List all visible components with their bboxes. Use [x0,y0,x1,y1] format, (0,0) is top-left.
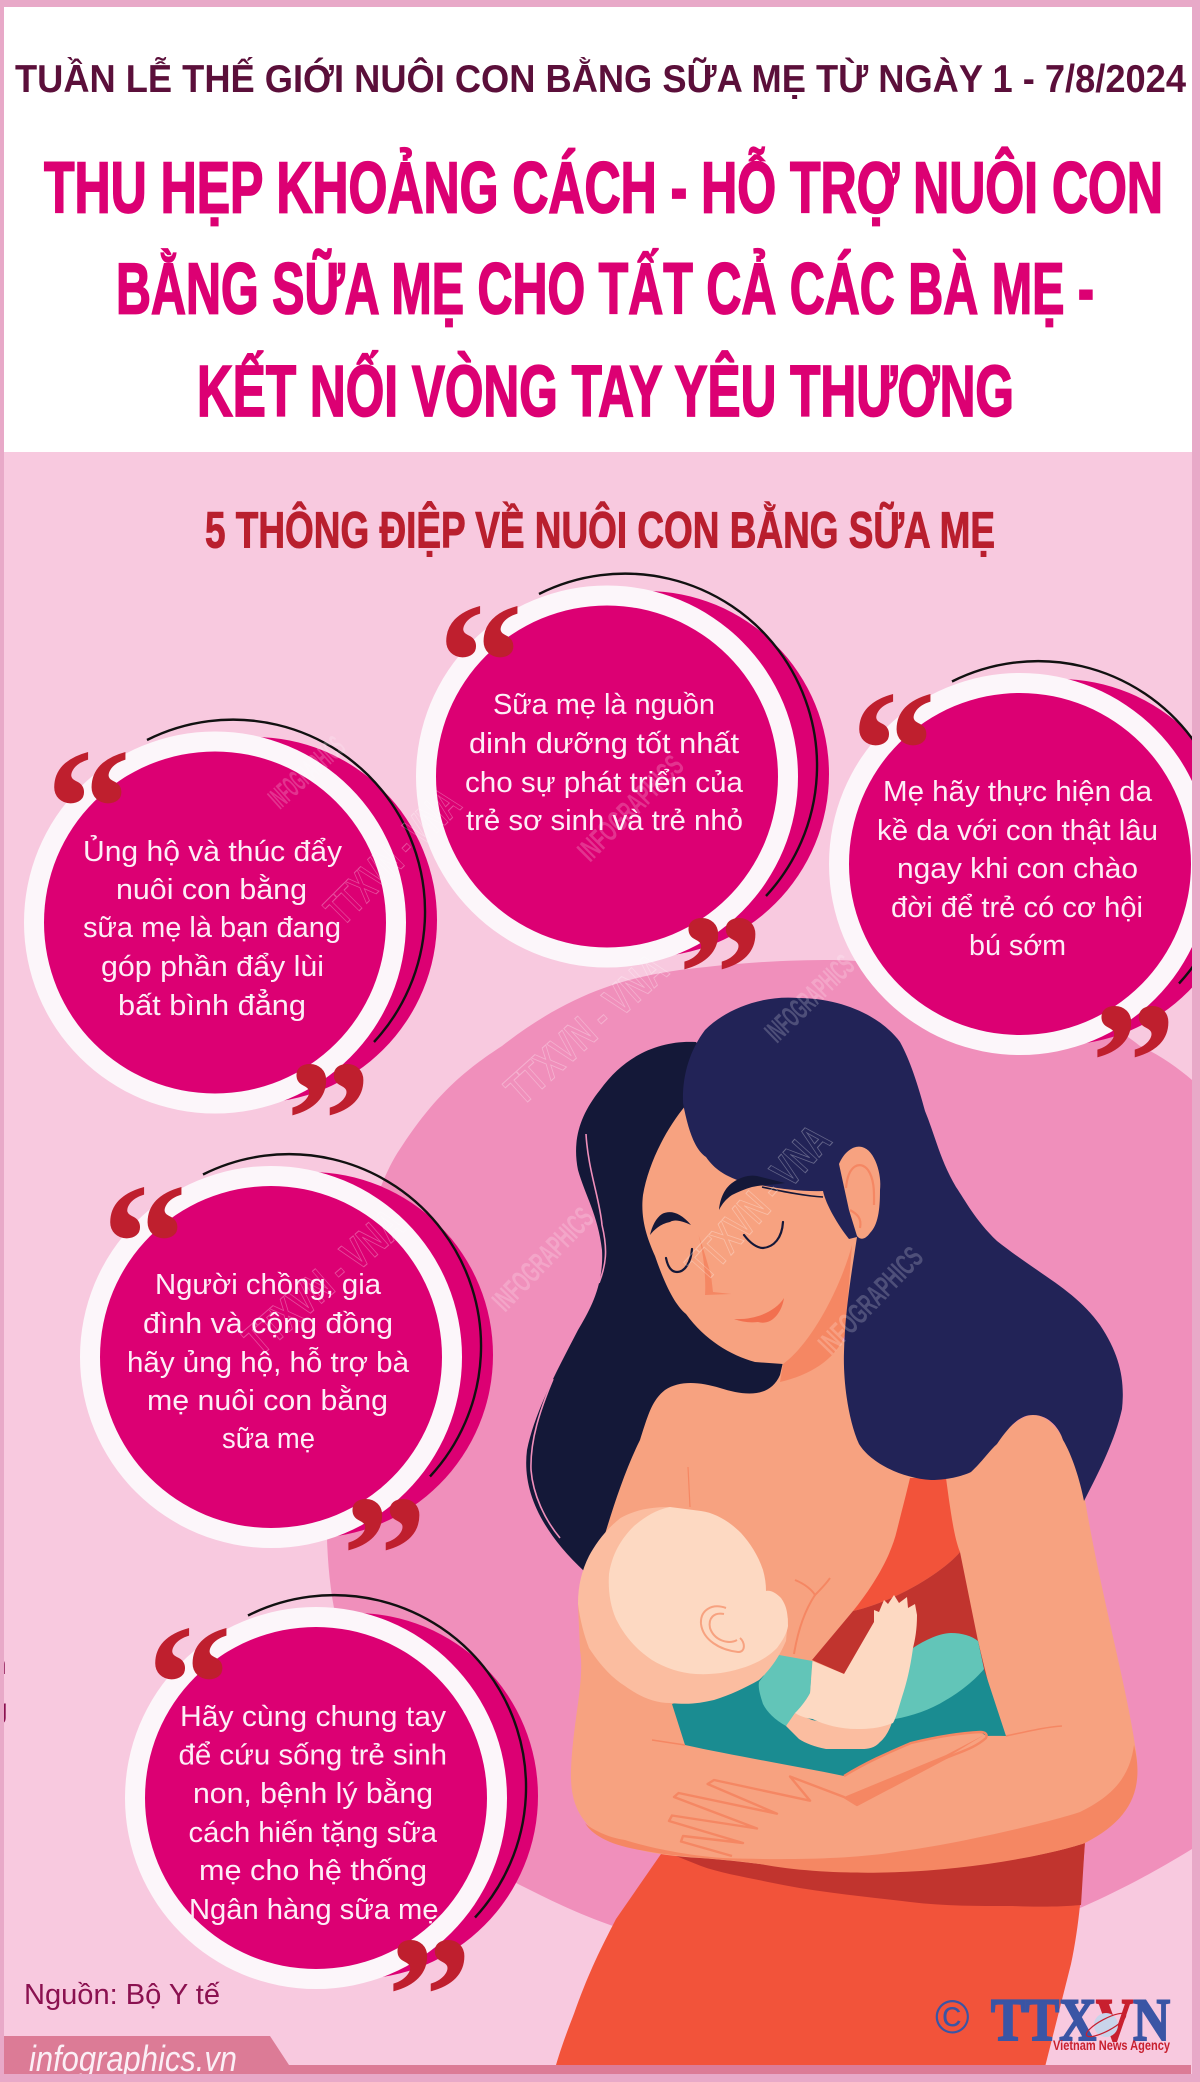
message text: đời để trẻ có cơ hội [891,892,1143,924]
dress waist shadow [661,1840,1085,1907]
message text [178,1701,447,1926]
message text: nuôi con bằng [116,874,307,906]
eyebrows [650,1176,785,1235]
front hair [683,998,1123,1501]
watermarks: TTXVN - VNA [496,944,677,1114]
message text: Sữa mẹ là nguồn [493,689,715,721]
agency wordmark: TTXVN [991,1987,1170,2053]
logo: TTXVN [935,1987,1170,2053]
mouth [734,1298,784,1323]
message text [83,835,343,1022]
quote marks: “ [147,1590,232,1778]
mother body and arms [571,1340,1137,1872]
baby arm and hand [795,1595,917,1729]
watermarks [234,730,930,1365]
lower dress [556,1843,1085,2065]
page background [4,452,1192,2074]
globe [1084,2009,1128,2041]
message text: bất bình đẳng [118,989,306,1022]
illustration: mother and baby [526,998,1137,2065]
watermarks: TTXVN - VNA [315,779,470,934]
neck shadow [780,1245,852,1382]
closed eyes [666,1222,783,1272]
quote marks [147,1590,472,2082]
quote marks: “ [438,568,523,756]
text: INFOGRAPHICS [263,730,352,815]
panel: message 4 [80,1149,493,1649]
message text: Mẹ hãy thực hiện da [883,776,1152,808]
message text: mẹ nuôi con bằng [147,1385,388,1417]
ear detail [846,1165,874,1228]
quote marks: “ [46,714,131,902]
watermarks: INFOGRAPHICS [759,949,861,1049]
quote marks [851,656,1176,1156]
message text [127,1269,409,1455]
message text [877,776,1158,962]
message text: mẹ cho hệ thống [199,1855,427,1887]
hair strand highlights [531,1069,1126,1538]
message text: đình và cộng đồng [143,1308,393,1340]
baby garment [672,1641,1006,1776]
panel: message 3 [829,656,1200,1156]
baby arm shade [786,1713,893,1749]
baby sleeve left [759,1655,812,1726]
background blob [327,960,1192,1927]
message text: góp phần đẩy lùi [101,951,324,983]
quote marks [102,1149,427,1649]
message text: để cứu sống trẻ sinh [178,1740,447,1772]
baby ear [701,1606,744,1652]
main title [44,146,1163,432]
watermarks: INFOGRAPHICS [572,749,690,868]
watermarks: TTXVN - VNA [677,1116,841,1290]
nose [698,1235,732,1295]
message text: hãy ủng hộ, hỗ trợ bà [127,1347,409,1379]
hair strand outline [846,1390,971,1495]
copyright mark: © [935,1990,970,2043]
panel: message 1 [24,714,437,1214]
back hair [526,1042,790,1572]
message text: cho sự phát triển của [465,767,743,799]
panel: message 5 [125,1590,538,2082]
panel: message 2 [416,568,829,1068]
baby garment right [895,1633,984,1719]
message text: non, bệnh lý bằng [193,1778,433,1810]
quote marks [46,714,371,1214]
quote marks: ” [678,880,763,1068]
message text: Người chồng, gia [155,1269,381,1301]
message text: sữa mẹ là bạn đang [83,912,341,944]
watermarks: TTXVN - VNA [234,1200,414,1365]
quote marks [438,568,763,1068]
quote marks: ” [342,1461,427,1649]
message text [465,689,743,837]
forearm shade [585,1745,1137,1873]
watermarks: INFOGRAPHICS [486,1201,600,1318]
leftover cropped text at left edge [0,1649,8,1724]
message text: dinh dưỡng tốt nhất [469,728,739,760]
quote marks: ” [286,1026,371,1214]
agency tagline: Vietnam News Agency [1053,2038,1170,2053]
quote marks: ” [1091,968,1176,1156]
message text: Ủng hộ và thúc đẩy [83,835,343,868]
message text: cách hiến tặng sữa [188,1817,437,1849]
dress shadow under breast [812,1552,990,1690]
panel: header [4,7,1192,452]
message text: Hãy cùng chung tay [180,1701,447,1733]
mother hands [652,1726,1062,1856]
message text: trẻ sơ sinh và trẻ nhỏ [466,805,743,837]
message text: sữa mẹ [222,1423,315,1455]
chest lines [688,1467,830,1654]
message text: kề da với con thật lâu [877,815,1158,847]
message text: bú sớm [969,930,1066,962]
footer band [4,2036,1191,2079]
website text: infographics.vn [29,2038,237,2079]
source note: Nguồn: Bộ Y tế [24,1979,220,2011]
watermarks: INFOGRAPHICS [812,1241,930,1361]
quote marks: “ [102,1149,187,1337]
message text: ngay khi con chào [897,853,1138,885]
baby head shade [578,1507,788,1704]
message text: Ngân hàng sữa mẹ [189,1894,438,1926]
fringe line [762,1187,823,1197]
ear [839,1147,880,1239]
quote marks: “ [851,656,936,844]
face and neck [642,1105,860,1375]
dress top [853,1478,960,1611]
baby head [609,1507,788,1674]
